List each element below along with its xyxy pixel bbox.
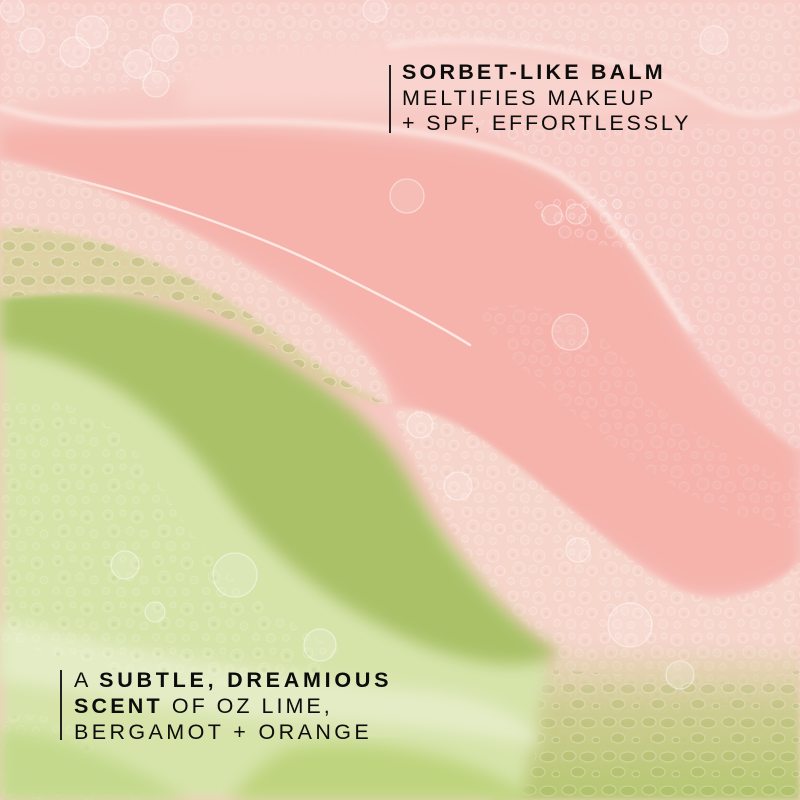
left pink-white foam band — [0, 160, 392, 405]
callout text: + SPF, EFFORTLESSLY — [402, 111, 691, 135]
bottom left green patch — [0, 730, 190, 800]
large bubbles — [0, 0, 728, 689]
callout divider line — [60, 670, 62, 740]
bottom green strip — [230, 744, 535, 800]
pale streak across green — [0, 620, 540, 745]
callout divider line — [389, 65, 390, 133]
callout text: A SUBTLE, DREAMIOUS — [74, 668, 392, 692]
white ridge lines — [0, 41, 800, 345]
light green area — [0, 280, 550, 800]
callout: subtle scent — [60, 668, 392, 744]
top foam area — [0, 0, 800, 115]
callout text: BERGAMOT + ORANGE — [74, 720, 372, 744]
callout text: MELTIFIES MAKEUP — [402, 86, 656, 110]
callout text: SORBET-LIKE BALM — [402, 60, 666, 84]
pink foam scatter — [480, 195, 800, 530]
green foam — [0, 398, 340, 800]
main pink band — [0, 127, 800, 594]
lower right foam base — [392, 409, 800, 800]
callout text: SCENT OF OZ LIME, — [74, 694, 333, 718]
callout text — [402, 60, 691, 135]
dark green pool — [0, 289, 560, 664]
right foam band — [470, 120, 800, 450]
callout text — [74, 668, 392, 744]
callout: sorbet-like balm — [389, 60, 691, 135]
